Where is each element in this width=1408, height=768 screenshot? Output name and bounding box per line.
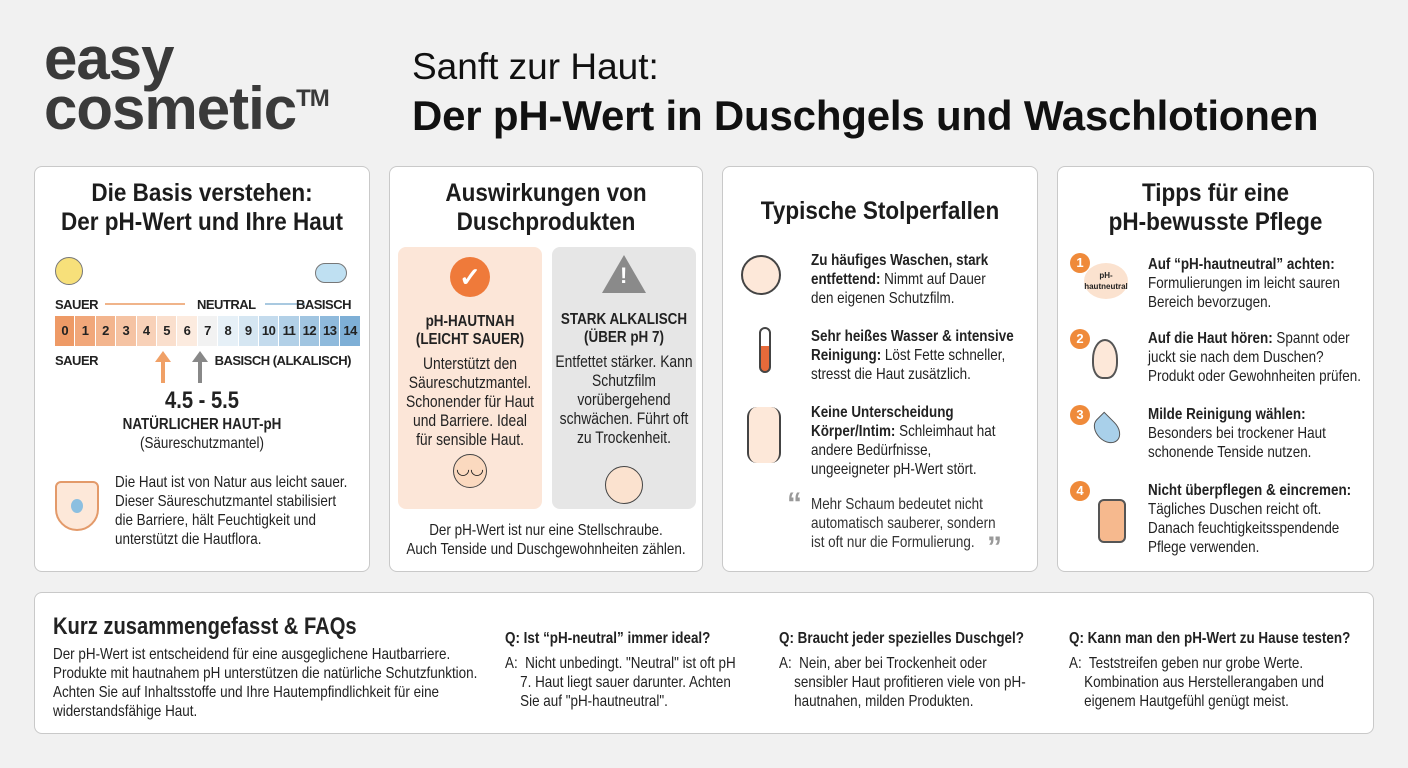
title: Der pH-Wert in Duschgels und Waschlotionen <box>412 92 1318 139</box>
scale labels top: BASISCH <box>296 297 351 312</box>
card: hautnah <box>398 247 542 509</box>
heading: Auswirkungen von <box>445 179 647 207</box>
scale labels top: NEUTRAL <box>197 297 256 312</box>
panel: Basis <box>34 166 370 572</box>
quote: ” <box>987 531 1002 564</box>
card: alkalisch: STARK ALKALISCH <box>561 311 687 328</box>
icon: lemon <box>55 257 83 285</box>
tip 3: 3 <box>1076 407 1084 422</box>
tip 3 <box>1070 405 1326 461</box>
pH scale: 1 <box>82 323 88 338</box>
note: Auch Tenside und Duschgewohnheiten zählen. <box>406 541 686 558</box>
logo: cosmeticTM <box>44 75 329 142</box>
tip 3: Milde Reinigung wählen: Besonders bei trockener Haut schonende Tenside nutzen. <box>1148 406 1326 461</box>
scale labels bottom: SAUER <box>55 353 98 368</box>
item 1: Zu häufiges Waschen, stark entfettend: Nimmt auf Dauer den eigenen Schutzfilm. <box>811 252 988 307</box>
faq 3: Q: Kann man den pH-Wert zu Hause testen? <box>1069 630 1350 647</box>
icon: shield <box>55 481 99 531</box>
faq 3 <box>1069 630 1350 710</box>
panel: Stolperfallen <box>722 166 1038 572</box>
tip 1: pH- <box>1099 271 1113 280</box>
faq 2: Q: Braucht jeder spezielles Duschgel? <box>779 630 1024 647</box>
pH scale: 8 <box>224 323 231 338</box>
pH scale: 7 <box>204 323 211 338</box>
text: Die Haut ist von Natur aus leicht sauer. Dieser Säureschutzmantel stabilisiert die Barriere, hält Feuchtigkeit und unterstützt die Hautflora. <box>115 474 347 548</box>
card: hautnah: ◡◡ <box>456 461 484 478</box>
icon: clock <box>741 255 781 295</box>
icon: soap <box>315 263 347 283</box>
tip 1: Auf “pH-hautneutral” achten: Formulierungen im leicht sauren Bereich bevorzugen. <box>1148 256 1340 311</box>
card: hautnah: ✓ <box>459 262 481 292</box>
summary: Der pH-Wert ist entscheidend für eine ausgeglichene Hautbarriere. Produkte mit hautnahem pH unterstützen die natürliche Schutzfunktion. Achten Sie auf Inhaltsstoffe und Ihre Hautempfindlichkeit für eine widerstandsfähige Haut. <box>53 646 477 720</box>
faq 1 <box>505 630 736 710</box>
natural pH: NATÜRLICHER HAUT-pH <box>123 416 281 433</box>
pH scale: 5 <box>163 323 170 338</box>
item 2: Sehr heißes Wasser & intensive Reinigung: Löst Fette schneller, stresst die Haut zusätzlich. <box>811 328 1014 383</box>
pH scale: 6 <box>184 323 190 338</box>
faq 2 <box>779 630 1026 710</box>
pH scale: 11 <box>283 323 295 338</box>
title <box>412 46 1318 139</box>
tip 4: 4 <box>1076 483 1084 498</box>
item 3: Keine Unterscheidung Körper/Intim: Schleimhaut hat andere Bedürfnisse, ungeeigneter pH-Wert stört. <box>811 404 995 478</box>
pH scale <box>55 316 360 346</box>
scale labels top: SAUER <box>55 297 98 312</box>
faq 3: A: Teststreifen geben nur grobe Werte. Kombination aus Herstellerangaben und eigenem Hautgefühl genügt meist. <box>1069 655 1324 710</box>
tip 1: 1 <box>1076 255 1084 270</box>
note: Der pH-Wert ist nur eine Stellschraube. <box>429 522 663 539</box>
pH scale: 13 <box>323 323 336 338</box>
tip 2: Auf die Haut hören: Spannt oder juckt sie nach dem Duschen? Produkt oder Gewohnheiten prüfen. <box>1148 330 1361 385</box>
icon: thermometer <box>759 327 771 373</box>
pH scale: 3 <box>122 323 129 338</box>
arrows <box>155 351 171 362</box>
pH scale: 14 <box>343 323 357 338</box>
panel: Stolperfallen: “ <box>787 487 802 520</box>
card: alkalisch: ! <box>620 263 627 288</box>
card: hautnah: pH-HAUTNAH <box>426 313 514 330</box>
quote: Mehr Schaum bedeutet nicht automatisch sauberer, sondern ist oft nur die Formulierung. <box>811 496 996 551</box>
heading: Der pH-Wert und Ihre Haut <box>61 208 343 236</box>
heading <box>1109 179 1322 236</box>
heading: Kurz zusammengefasst & FAQs <box>53 613 357 640</box>
heading: Typische Stolperfallen <box>761 197 999 225</box>
tip 4: Nicht überpflegen & eincremen: Tägliches Duschen reicht oft. Danach feuchtigkeitsspendende Pflege verwenden. <box>1148 482 1351 556</box>
logo: easy <box>44 25 173 92</box>
pH scale: 12 <box>303 323 316 338</box>
title: Sanft zur Haut: <box>412 46 659 87</box>
heading: Tipps für eine <box>1142 179 1289 207</box>
panel: Auswirkungen <box>389 166 703 572</box>
panel: Tipps <box>1057 166 1374 572</box>
tip 2: 2 <box>1076 331 1084 346</box>
pH scale: 4 <box>143 323 150 338</box>
tip 1: hautneutral <box>1084 282 1128 291</box>
pH scale: 2 <box>102 323 109 338</box>
heading: Duschprodukten <box>457 208 635 236</box>
faq 2: A: Nein, aber bei Trockenheit oder sensibler Haut profitieren viele von pH-hautnahen, milden Produkten. <box>779 655 1026 710</box>
scale labels bottom <box>55 353 351 368</box>
faq 1: Q: Ist “pH-neutral” immer ideal? <box>505 630 710 647</box>
pH scale: 0 <box>61 323 68 338</box>
tip 1 <box>1070 253 1340 311</box>
panel: FAQ <box>34 592 1374 734</box>
logo <box>44 25 329 142</box>
card: alkalisch <box>552 247 696 509</box>
scale labels top <box>55 297 351 312</box>
natural pH <box>123 387 281 452</box>
card: alkalisch: Entfettet stärker. Kann Schutzfilm vorübergehend schwächen. Führt oft zu Trockenheit. <box>555 353 693 447</box>
scale labels bottom: BASISCH (ALKALISCH) <box>215 353 351 368</box>
heading <box>61 179 343 236</box>
card: alkalisch: (ÜBER pH 7) <box>584 329 664 346</box>
heading: pH-bewusste Pflege <box>1109 208 1322 236</box>
card: hautnah: (LEICHT SAUER) <box>416 331 524 348</box>
note <box>406 522 686 558</box>
natural pH: 4.5 - 5.5 <box>165 387 239 414</box>
quote <box>787 487 1002 564</box>
icon: body <box>747 407 781 463</box>
pH scale: 10 <box>262 323 275 338</box>
card: hautnah: Unterstützt den Säureschutzmantel. Schonender für Haut und Barriere. Ideal für sensible Haut. <box>406 355 534 449</box>
heading <box>445 179 647 236</box>
pH scale: 9 <box>245 323 252 338</box>
faq 1: A: Nicht unbedingt. "Neutral" ist oft pH 7. Haut liegt sauer darunter. Achten Sie auf "pH-hautneutral". <box>505 655 736 710</box>
natural pH: (Säureschutzmantel) <box>140 435 264 452</box>
heading: Die Basis verstehen: <box>91 179 313 207</box>
